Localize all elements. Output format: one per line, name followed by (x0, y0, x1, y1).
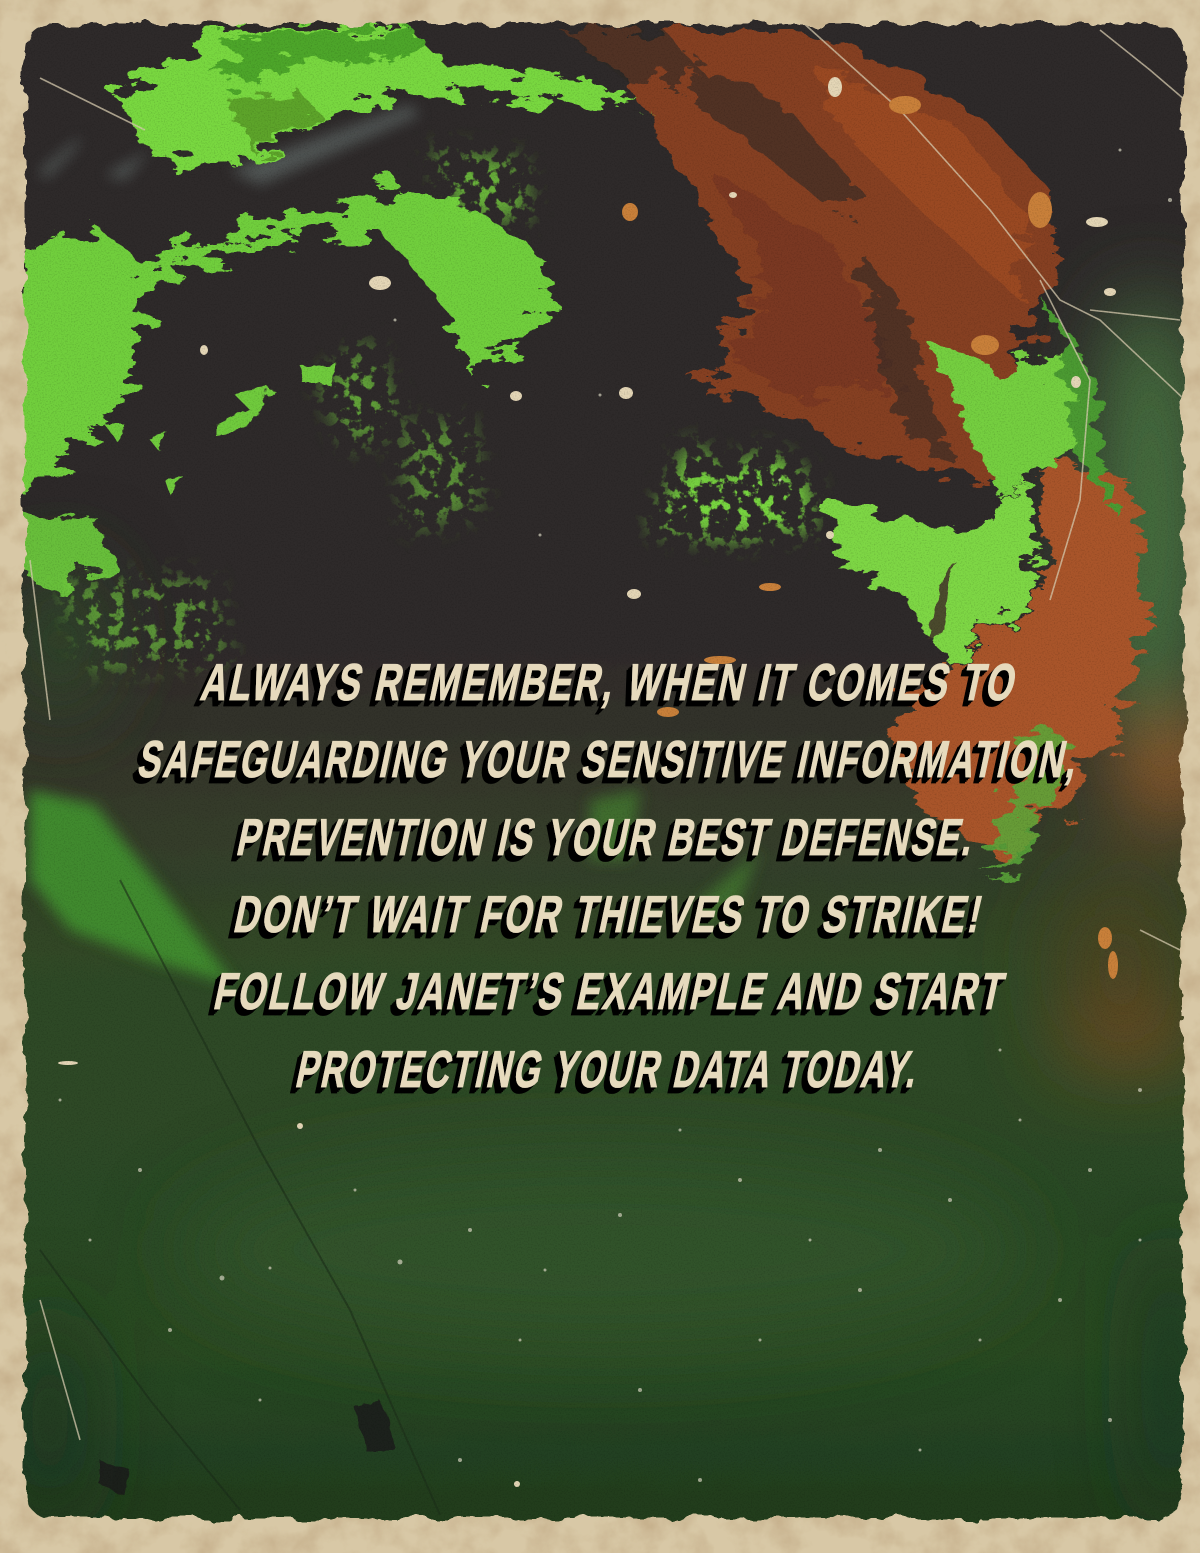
green paint top left (115, 20, 640, 170)
tonal washes (10, 290, 1200, 1530)
slate streaks top left (40, 105, 420, 185)
dark smudges (100, 560, 955, 1495)
green paint left (10, 188, 550, 590)
green flecks (105, 362, 335, 495)
rust paint lower right (890, 460, 1150, 855)
closing message (133, 654, 1086, 1099)
dark streaks in rust (560, 25, 950, 460)
rust paint main sweep (560, 30, 1060, 480)
dark green arc lower left (30, 790, 760, 985)
orange chips (622, 96, 1118, 979)
green splatter centre (60, 150, 815, 670)
green paint right (825, 310, 1110, 880)
dark cracks (40, 880, 440, 1515)
star speckles (58, 148, 1172, 1482)
